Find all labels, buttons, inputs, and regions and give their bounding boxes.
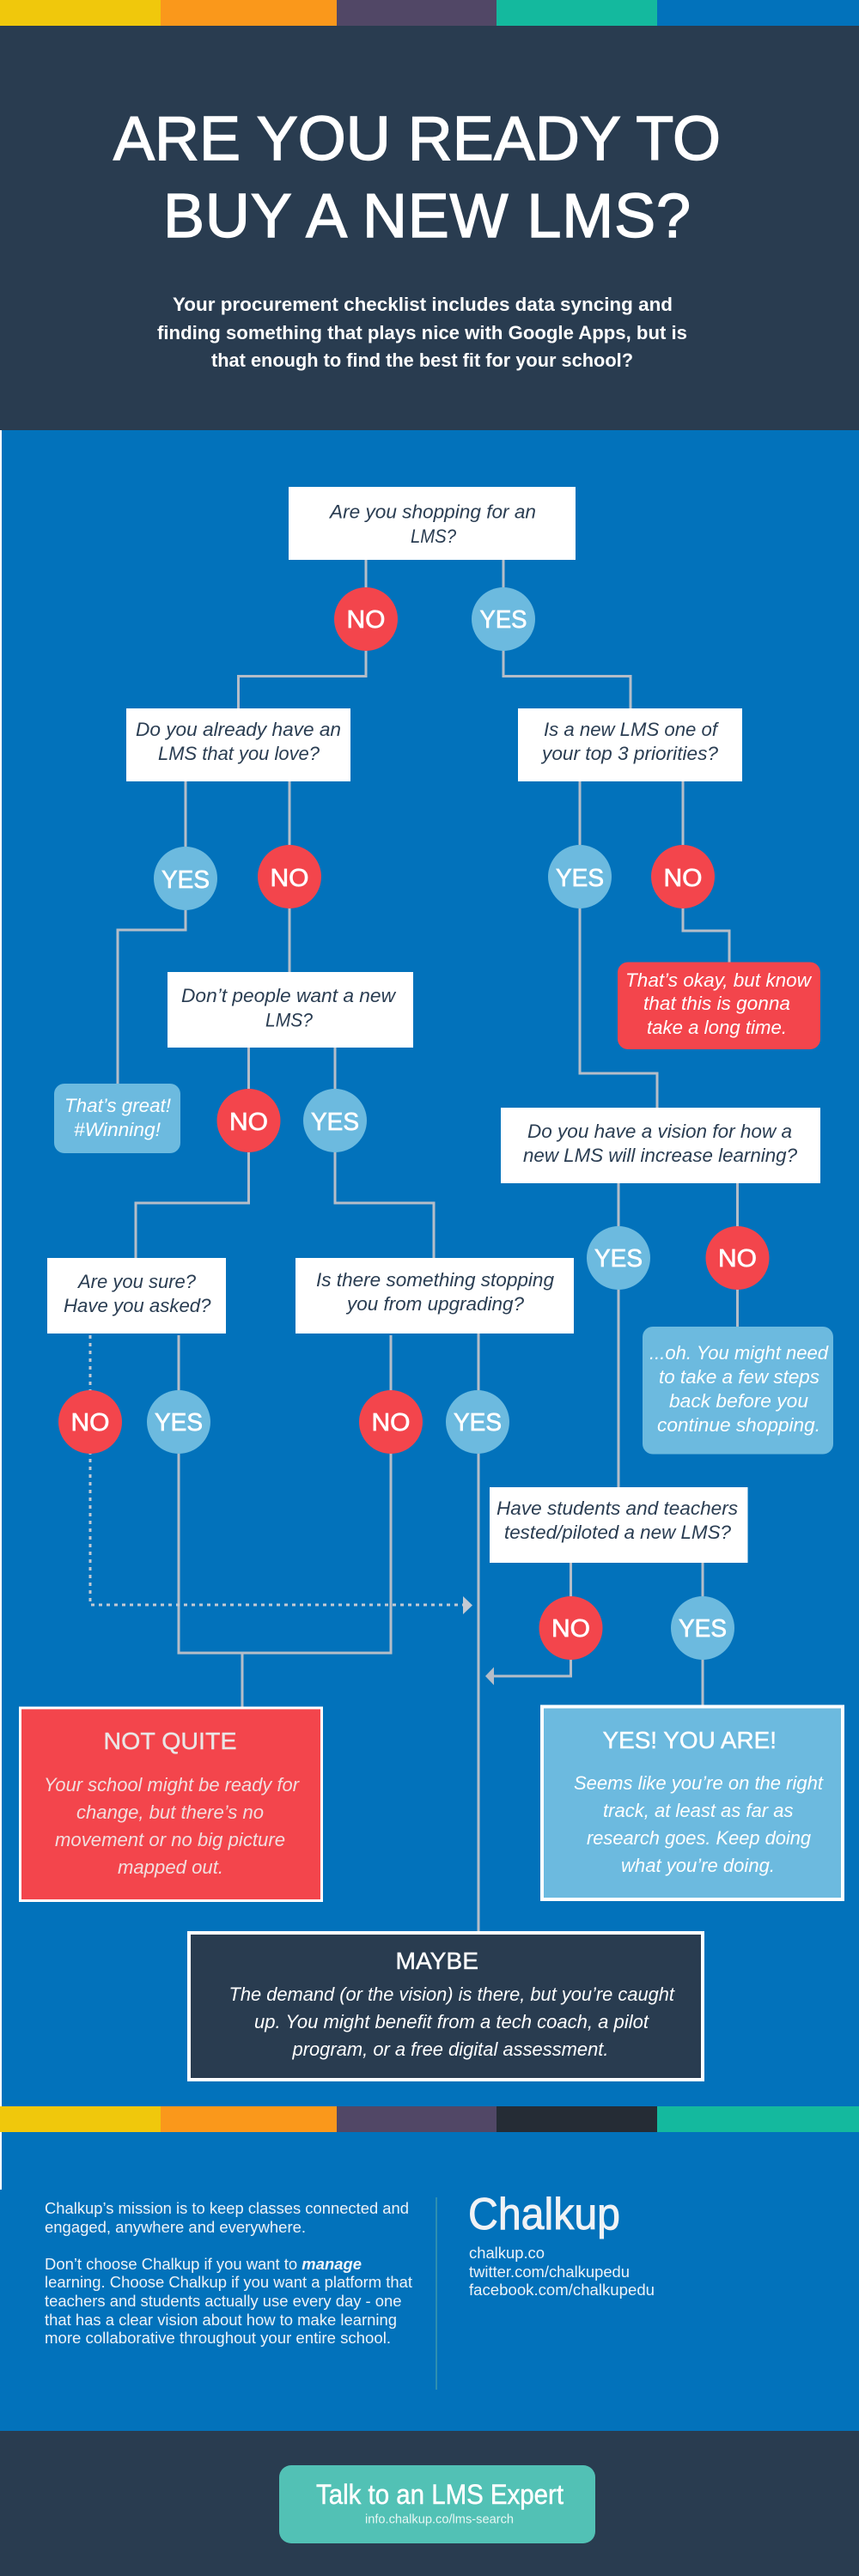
badge: YES: YES [556,865,604,892]
callout: take a few steps back: continue shopping. [657,1414,820,1436]
badge: YES: YES [594,1245,643,1273]
subtitle [157,294,687,371]
connector: vision YES to piloted question [617,1183,620,1487]
badge: NO [216,1089,280,1152]
panel: header [0,0,859,430]
badge: NO: NO [718,1245,757,1273]
badge: NO: NO [70,1409,110,1437]
badge: YES: YES [454,1409,502,1437]
badge: YES [446,1390,509,1454]
badge: YES: YES [311,1109,359,1136]
question: top 3 priorities [518,708,742,781]
question: top 3 priorities: Is a new LMS one of [544,719,720,740]
badge: YES [671,1596,734,1660]
outcome panel: not quite: Your school might be ready for [44,1774,301,1795]
callout: take a few steps back: back before you [669,1390,808,1412]
badge: YES [548,845,612,908]
question: vision for learning [501,1108,820,1183]
badge: YES [472,587,535,651]
question: top 3 priorities: your top 3 priorities? [540,743,719,764]
badge: NO [651,845,715,908]
title [113,105,721,251]
callout: long time: that this is gonna [643,993,790,1014]
connector: priorities NO to long time callout [683,781,729,963]
question: people want a new LMS: Don’t people want a new [181,985,397,1006]
text block: links [469,2245,655,2299]
outcome panel: yes you are: track, at least as far as [603,1800,794,1821]
badge: NO: NO [270,865,309,892]
logo: Chalkup: Chalkup [468,2190,620,2239]
button: talk to an LMS expert: Talk to an LMS Expert [316,2479,564,2510]
connector: stopping YES to Maybe [478,1330,479,1932]
text block: links: chalkup.co [469,2245,545,2262]
badge: NO [258,845,321,908]
outcome panel: not quite: mapped out. [118,1856,223,1878]
subtitle: Your procurement checklist includes data syncing and [173,294,673,315]
question: vision for learning: Do you have a vision for how a [527,1121,792,1142]
connector: first question to NO branch [239,560,366,708]
connector: piloted NO arrow to Maybe line [485,1563,570,1685]
callout: take a few steps back [643,1327,833,1455]
badge: YES: YES [679,1615,727,1643]
text block: Chalkup mission: more collaborative throughout your entire school. [45,2330,391,2347]
badge: NO: NO [551,1615,590,1643]
badge: YES [587,1226,650,1290]
badge: NO [359,1390,423,1454]
connector: priorities YES to vision question [580,781,657,1108]
badge: NO: NO [371,1409,411,1437]
bottom colour strip [0,2106,859,2132]
text block: Chalkup mission [45,2200,412,2347]
callout: that's great: #Winning! [74,1119,161,1140]
badge: YES: YES [161,866,210,894]
question: something stopping you: Is there something stopping [316,1269,555,1291]
question: already have an LMS: Do you already have an [136,719,341,740]
outcome panel: yes you are: YES! YOU ARE! [603,1727,777,1753]
outcome panel: maybe: MAYBE [395,1947,478,1974]
question: shopping for an LMS: Are you shopping for an [328,501,536,522]
callout: long time [618,962,820,1049]
connector: people want YES to something stopping [335,1048,434,1258]
outcome panel: not quite [21,1708,321,1901]
callout: that's great [54,1084,180,1153]
callout: long time: take a long time. [647,1017,787,1038]
outcome panel: yes you are: research goes. Keep doing [587,1827,812,1849]
badge: NO: NO [347,606,385,634]
outcome panel: maybe [189,1933,703,2080]
connector: first question to YES branch [503,560,631,708]
outcome panel: yes you are [542,1707,843,1899]
outcome panel: not quite: movement or no big picture [55,1829,285,1850]
title: BUY A NEW LMS? [163,182,691,251]
text block: Chalkup mission: that has a clear vision about how to make learning [45,2312,397,2329]
connector: YES and NO merging into Not Quite [179,1335,391,1707]
button: talk to an LMS expert: info.chalkup.co/lms-search [365,2512,514,2526]
outcome panel: maybe: program, or a free digital assessment. [292,2038,608,2060]
question: tested or piloted: tested/piloted a new LMS? [504,1522,732,1543]
badge: NO: NO [663,865,703,892]
panel: flowchart background [0,430,859,2431]
top colour strip [0,0,859,26]
callout: that's great: That’s great! [64,1095,171,1116]
outcome panel: not quite: NOT QUITE [103,1728,237,1754]
connector: vision NO to take a few steps callout [736,1183,739,1327]
outcome panel: maybe: The demand (or the vision) is there, but you’re caught [228,1984,675,2005]
text block: Chalkup mission: learning. Choose Chalkup if you want a platform that [45,2274,412,2291]
badge: NO [334,587,398,651]
connector: piloted YES to Yes You Are [701,1563,704,1705]
question: people want a new LMS [168,972,413,1048]
question: shopping for an LMS [289,487,576,560]
badge: NO [706,1226,770,1290]
subtitle: finding something that plays nice with Google Apps, but is [157,322,687,343]
question: are you sure [47,1258,226,1334]
subtitle: that enough to find the best fit for your school? [211,349,633,371]
connector: love LMS NO to Don't people want [289,781,290,972]
text block: Chalkup mission: teachers and students actually use every day - one [45,2293,402,2310]
text block: links: twitter.com/chalkupedu [469,2263,630,2281]
question: something stopping you [295,1258,574,1334]
question: tested or piloted: Have students and teachers [497,1498,738,1519]
question: shopping for an LMS: LMS? [411,526,457,547]
text block: Chalkup mission: engaged, anywhere and everywhere. [45,2219,306,2236]
badge: YES [154,847,217,910]
badge: YES [147,1390,210,1454]
callout: long time: That’s okay, but know [625,969,813,991]
outcome panel: yes you are: what you’re doing. [621,1855,775,1876]
badge: NO [58,1390,122,1454]
text block: Chalkup mission: Chalkup’s mission is to keep classes connected and [45,2200,409,2217]
badge: YES [303,1089,367,1152]
question: something stopping you: you from upgrading? [345,1293,525,1315]
question: people want a new LMS: LMS? [265,1010,314,1030]
outcome panel: maybe: up. You might benefit from a tech coach, a pilot [254,2011,649,2032]
question: are you sure: Have you asked? [64,1295,211,1316]
connector: people want NO to are you sure [136,1048,249,1258]
callout: take a few steps back: to take a few steps [659,1366,819,1388]
connector: dotted arrow from are you sure NO [90,1335,472,1614]
connector: love LMS YES to That's great [118,781,186,1084]
question: already have an LMS [126,708,350,781]
text block: Chalkup mission: Don’t choose Chalkup if you want to manage [45,2256,362,2273]
title: ARE YOU READY TO [113,105,721,173]
question: vision for learning: new LMS will increase learning? [523,1145,798,1166]
badge: YES: YES [155,1409,203,1437]
question: are you sure: Are you sure? [76,1271,197,1292]
badge: NO: NO [229,1109,268,1136]
panel: footer [0,2431,859,2576]
badge: YES: YES [479,606,527,634]
text block: links: facebook.com/chalkupedu [469,2281,655,2299]
outcome panel: not quite: change, but there’s no [76,1801,264,1823]
question: tested or piloted [490,1487,747,1563]
outcome panel: yes you are: Seems like you’re on the right [574,1772,824,1794]
callout: take a few steps back: ...oh. You might need [649,1342,829,1364]
badge: NO [539,1596,603,1660]
button: talk to an LMS expert [279,2465,595,2543]
question: already have an LMS: LMS that you love? [158,743,320,764]
